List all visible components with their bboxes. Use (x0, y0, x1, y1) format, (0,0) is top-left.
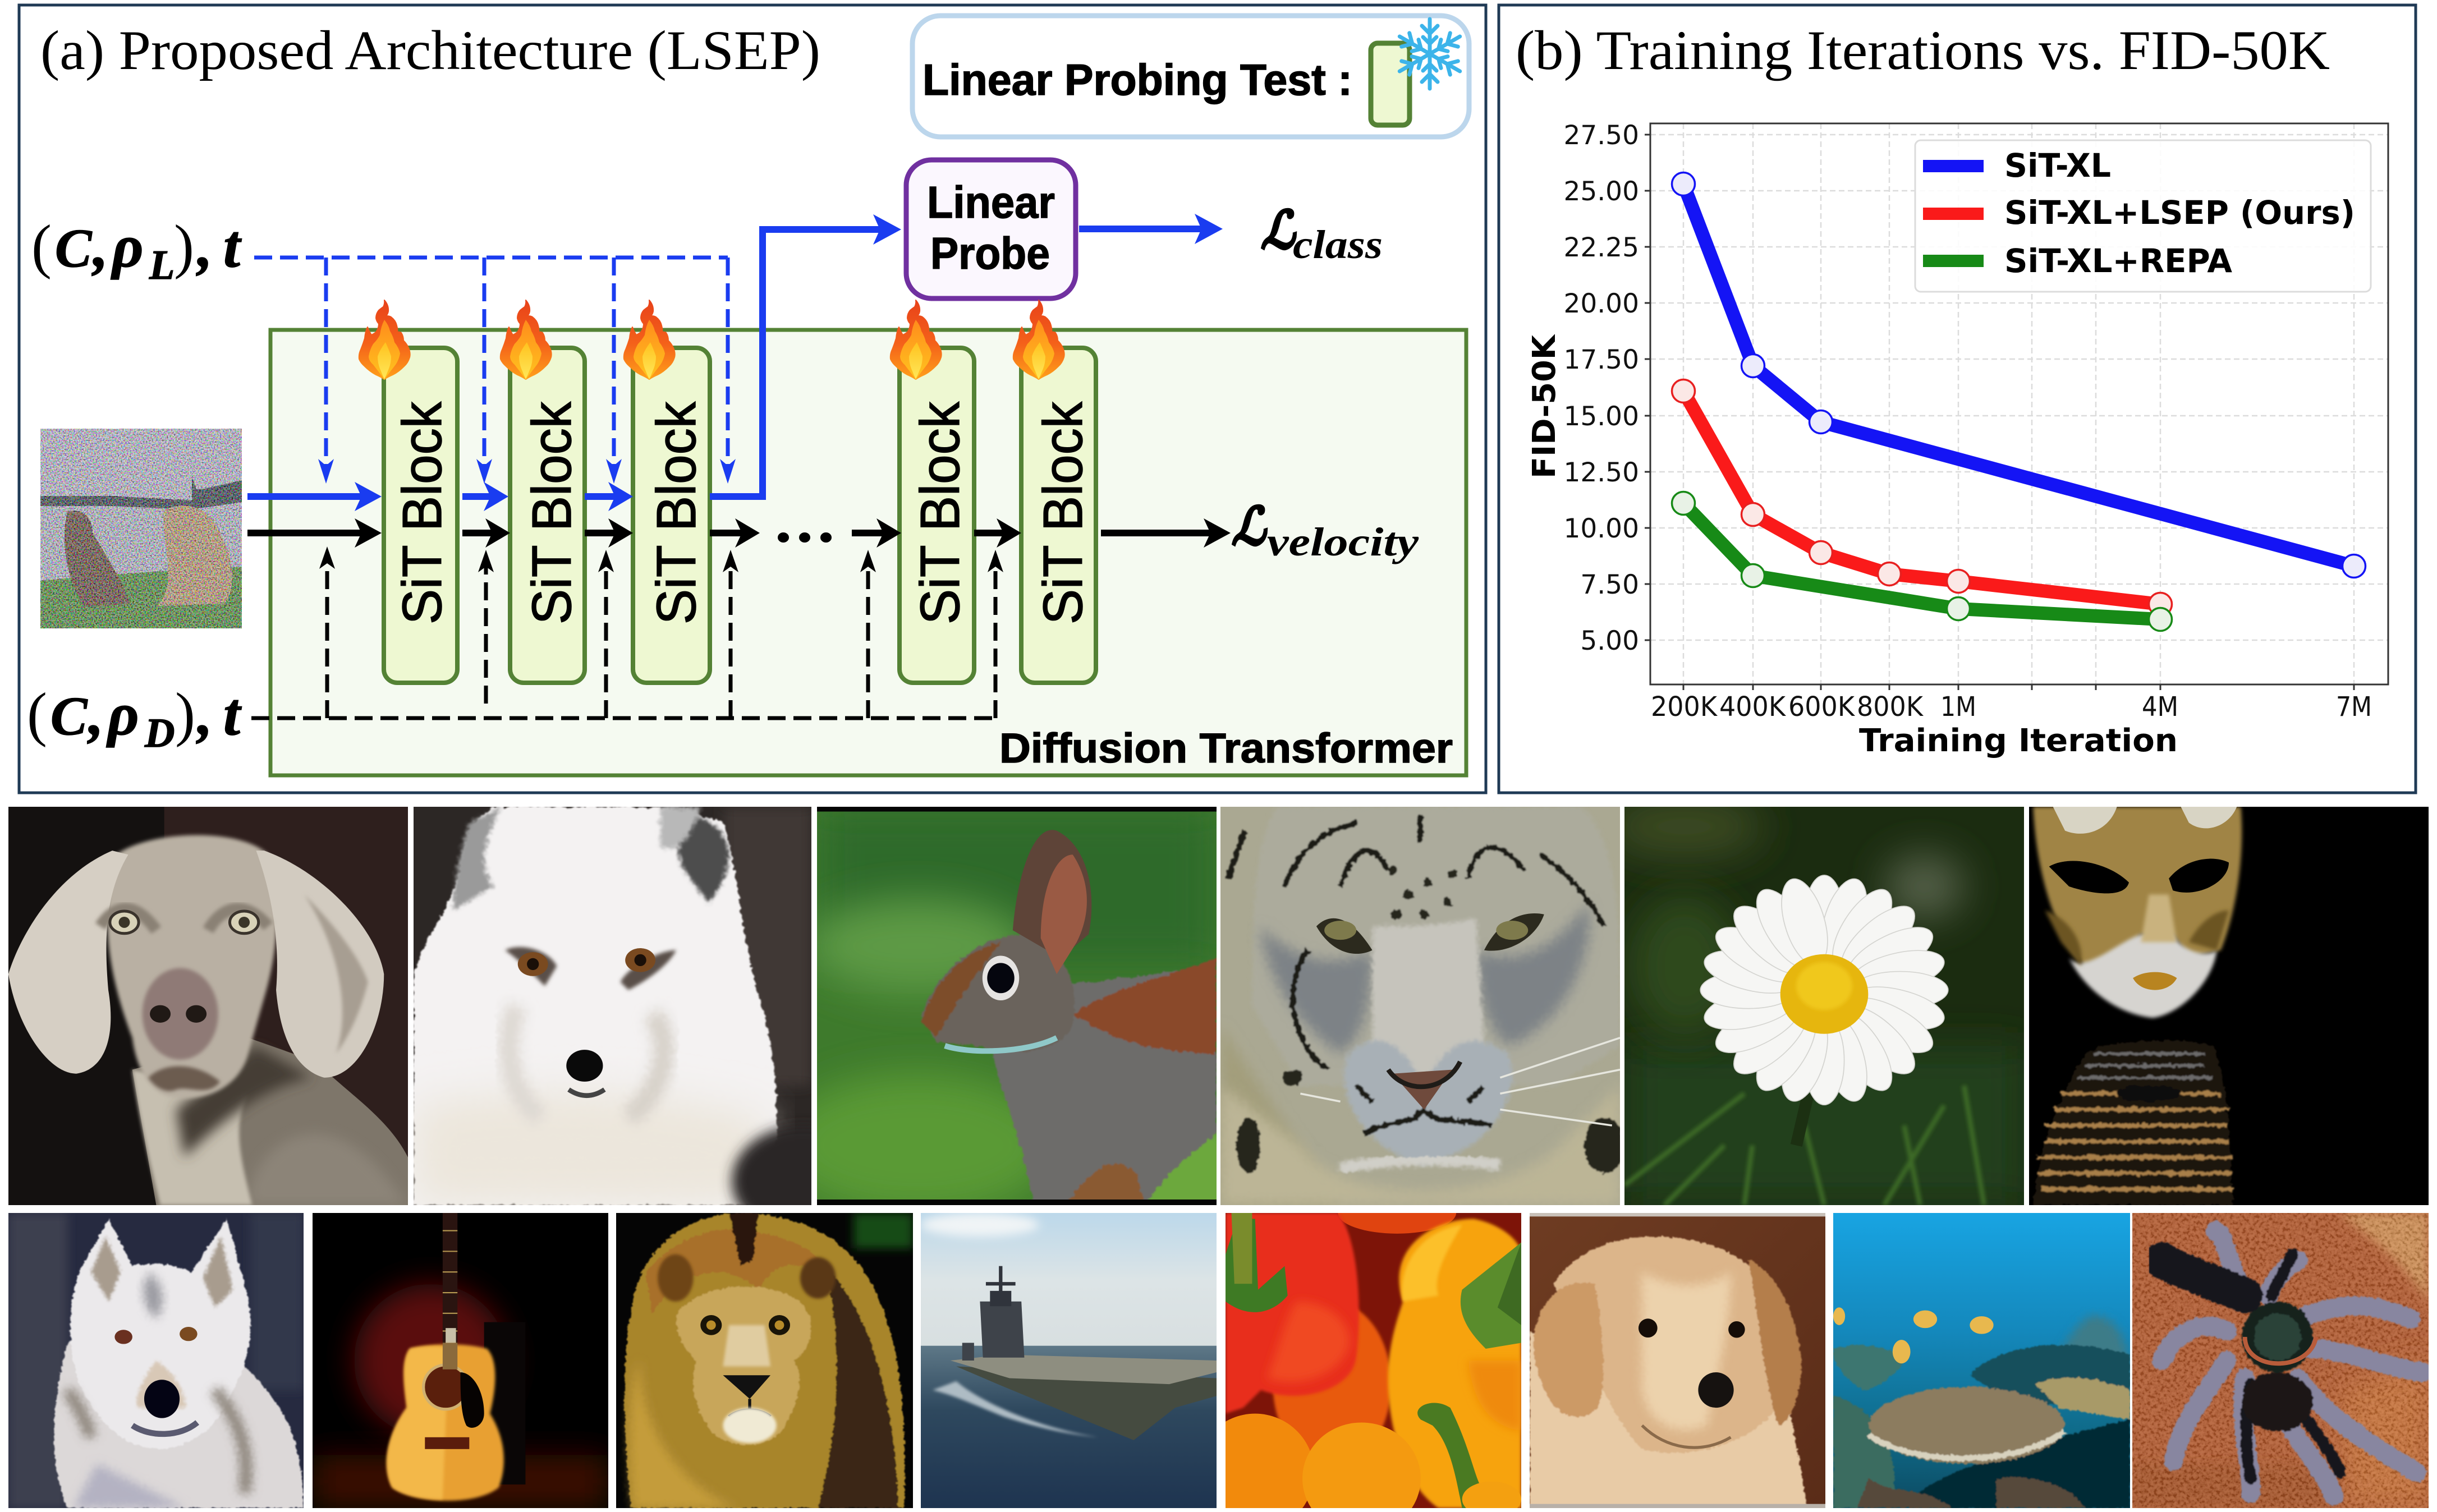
icon: snowflake (1396, 19, 1464, 89)
y axis tick labels: 12.50 (1563, 457, 1639, 488)
photo: aircraft carrier (921, 1213, 1217, 1508)
condition input: rho D: ρ (106, 681, 139, 748)
condition input: rho L: , (196, 213, 213, 280)
x axis tick labels: 400K (1719, 691, 1786, 723)
x axis tick labels: 200K (1651, 691, 1718, 723)
black dashed arrowheads (319, 546, 1003, 572)
photo: coral reef (1833, 1213, 2130, 1508)
panel: proposed architecture (19, 5, 1486, 793)
title: proposed architecture: (a) Proposed Architecture (LSEP) (40, 19, 820, 81)
SiT block 4: SiT Block (909, 401, 971, 624)
label: diffusion transformer: Diffusion Transformer (999, 725, 1453, 771)
series: SiT-XL (1672, 173, 2366, 578)
blue dashed arrowheads (318, 459, 736, 484)
y axis tick labels: 5.00 (1580, 626, 1639, 656)
x axis tick labels: 4M (2142, 691, 2178, 723)
SiT block 1: SiT Block (391, 401, 453, 624)
loss: class (1261, 202, 1383, 267)
condition input: rho L: ) (174, 213, 194, 280)
chart legend (1915, 140, 2371, 292)
SiT block 3: SiT Block (645, 401, 707, 624)
condition input: rho L: C (55, 218, 93, 279)
photo: daisy (1624, 807, 2024, 1205)
title: training iterations: (b) Training Iterations vs. FID-50K (1516, 19, 2330, 81)
y axis tick labels: 15.00 (1563, 401, 1639, 432)
photo: golden retriever puppy (1530, 1213, 1825, 1508)
loss: class: ℒ (1261, 202, 1296, 259)
series: SiT-XL+LSEP (1672, 379, 2172, 616)
photo: acoustic guitar (313, 1213, 608, 1508)
photo: white wolf (8, 1213, 304, 1508)
SiT block 5 (1021, 348, 1096, 683)
condition input: rho L: t (223, 213, 242, 280)
SiT block 4 (899, 348, 974, 683)
x axis tick labels: 1M (1940, 691, 1976, 723)
icons: flames (359, 300, 1064, 379)
photo: rabbit (817, 807, 1217, 1205)
blue arrow to class loss (1079, 214, 1223, 244)
linear probe box: Linear (927, 177, 1055, 227)
loss: velocity: velocity (1267, 520, 1419, 564)
SiT block 2 (510, 348, 585, 683)
SiT block 2: SiT Block (521, 401, 582, 624)
black forward arrows (247, 518, 1231, 548)
photo: lion (616, 1213, 913, 1508)
series: SiT-XL+REPA (1672, 491, 2172, 631)
y axis tick labels: 25.00 (1563, 176, 1639, 207)
condition input: rho D: t (223, 681, 242, 748)
x axis tick labels: 7M (2336, 691, 2372, 723)
photo: venetian mask (2029, 807, 2429, 1205)
blue forward arrows (247, 482, 633, 511)
condition input: rho D: ) (175, 681, 195, 748)
y axis tick labels: 17.50 (1563, 344, 1639, 375)
condition input: rho L: ρ (111, 213, 144, 280)
condition input: rho D: ( (27, 681, 47, 748)
ellipsis dots (778, 532, 832, 543)
y axis tick labels: 20.00 (1563, 288, 1639, 319)
x axis tick labels: 600K (1788, 691, 1855, 723)
axis title: FID-50K: FID-50K (1526, 333, 1563, 479)
SiT block 5: SiT Block (1032, 401, 1094, 624)
photo: snow leopard (1220, 807, 1620, 1205)
loss: velocity (1232, 498, 1419, 564)
photo: arctic fox (414, 807, 811, 1205)
condition input: rho D: , (196, 681, 213, 748)
loss: velocity: ℒ (1232, 498, 1267, 555)
chart legend: SiT-XL+REPA (2004, 242, 2232, 280)
chart legend: SiT-XL+LSEP (Ours) (2004, 194, 2355, 232)
legend: linear probing test: Linear Probing Test : (923, 55, 1352, 104)
x axis tick labels: 800K (1857, 691, 1924, 723)
condition input: rho D: D (144, 710, 175, 756)
blue arrow to linear probe (710, 214, 901, 497)
panel: training iterations chart (1499, 5, 2416, 793)
linear probe box (906, 160, 1076, 298)
condition input: rho D: , (87, 681, 104, 748)
y axis tick labels (1563, 120, 1639, 656)
x axis tick labels (1651, 691, 2372, 723)
linear probe box: Probe (930, 228, 1050, 278)
photo: tarantula (2132, 1213, 2429, 1508)
blue dashed conditioning line (254, 258, 728, 477)
condition input: rho L: , (91, 213, 108, 280)
noisy input image (40, 429, 242, 628)
photo: weimaraner dog (8, 807, 408, 1205)
diffusion transformer container (270, 330, 1466, 775)
condition input: rho D: C (51, 686, 88, 747)
SiT block 3 (633, 348, 710, 683)
legend: linear probing test (912, 16, 1469, 137)
SiT block 1 (384, 348, 457, 683)
y axis tick labels: 27.50 (1563, 120, 1639, 151)
y axis tick labels: 22.25 (1563, 232, 1639, 263)
photo: bell peppers (1226, 1213, 1521, 1508)
black dashed conditioning line (251, 555, 997, 718)
axis title: training iteration: Training Iteration (1859, 723, 2178, 759)
loss: class: class (1293, 222, 1383, 267)
chart legend: SiT-XL (2004, 146, 2111, 185)
line chart (1526, 120, 2388, 759)
condition input: rho L: ( (31, 213, 52, 280)
condition input: rho L: L (149, 242, 175, 288)
y axis tick labels: 7.50 (1580, 569, 1639, 600)
y axis tick labels: 10.00 (1563, 513, 1639, 544)
